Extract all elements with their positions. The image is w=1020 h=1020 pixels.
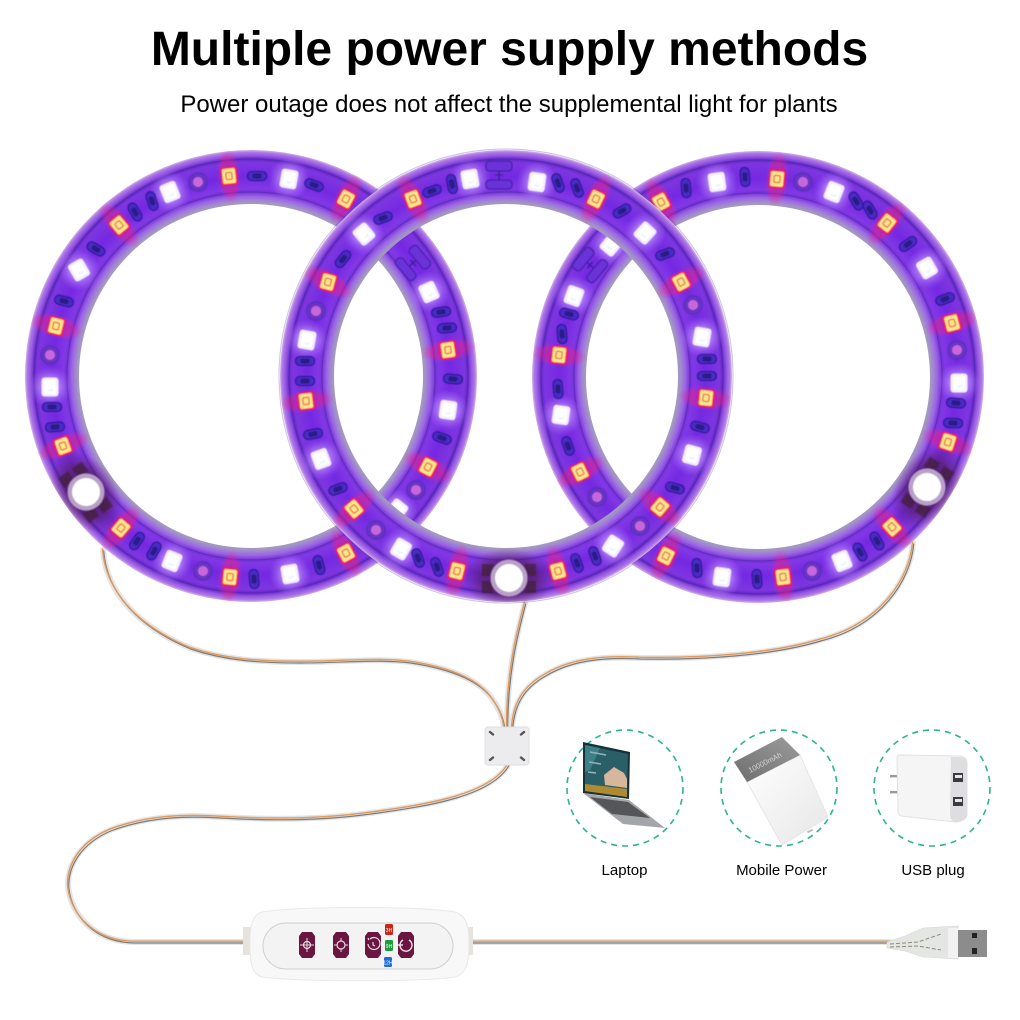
button: brightness down: [333, 932, 349, 958]
icon: power bank: [721, 730, 837, 846]
label: USB plug: USB plug: [901, 862, 965, 879]
ring 3 LEDs: [550, 167, 968, 589]
timer indicators: 9H: [386, 944, 393, 950]
subtitle: Power outage does not affect the supplemental light for plants: [180, 91, 838, 118]
label: laptop: Laptop: [602, 862, 647, 879]
icon: laptop: [567, 730, 683, 846]
timer indicators: 3H: [386, 928, 393, 934]
button: brightness up: [299, 932, 315, 958]
timer indicators: 12H: [383, 960, 393, 966]
ring 3 glows: [530, 150, 982, 606]
label: mobile power: Mobile Power: [736, 862, 827, 879]
left LED ring: [25, 147, 477, 606]
button: timer: [365, 932, 381, 958]
title: Multiple power supply methods: [151, 23, 868, 76]
junction box: [485, 727, 529, 765]
button: power: [398, 932, 414, 958]
remote controller: [243, 908, 473, 981]
ring 2 glows: [277, 158, 735, 608]
ring 2 LEDs: [296, 161, 716, 596]
icon: power bank: 10000mAh: [747, 750, 783, 775]
USB connector: [887, 926, 987, 959]
right LED ring: [530, 150, 984, 606]
timer indicators: [383, 924, 393, 967]
middle LED ring: [277, 149, 735, 608]
ring 1 glows: [26, 147, 477, 606]
power cables: [68, 542, 914, 943]
ring 1 LEDs: [41, 166, 463, 589]
icon: USB plug: [874, 730, 990, 846]
